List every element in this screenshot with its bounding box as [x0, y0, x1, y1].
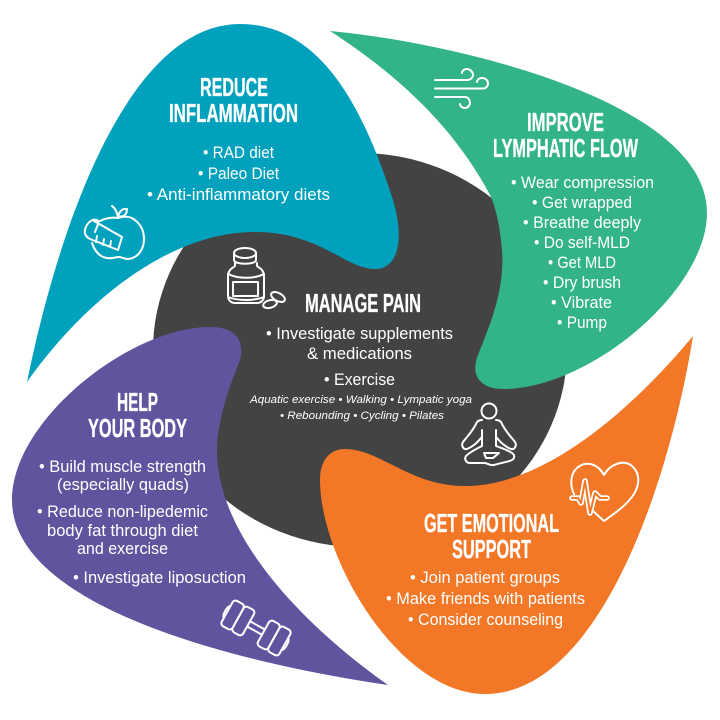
list: lymphatic actions	[511, 174, 654, 332]
icon: meditating figure	[462, 404, 516, 465]
list: body actions: • Reduce non-lipedemic	[37, 503, 208, 521]
list: pain actions: • Investigate supplements	[266, 325, 453, 343]
panel: get emotional support background	[320, 336, 693, 694]
heading: get emotional support: GET EMOTIONAL	[424, 508, 559, 538]
heading: help your body: YOUR BODY	[88, 413, 187, 443]
section: reduce inflammation text	[147, 72, 330, 204]
heading: improve lymphatic flow	[493, 107, 638, 163]
list: diets: • RAD diet	[203, 144, 274, 162]
icon: dumbbell	[218, 598, 294, 658]
section: help your body text	[37, 387, 246, 587]
list: lymphatic actions: • Get MLD	[548, 254, 616, 272]
list: support actions: • Join patient groups	[410, 569, 560, 587]
list: lymphatic actions: • Do self-MLD	[534, 234, 630, 252]
list: body actions: and exercise	[77, 540, 168, 558]
panel: reduce inflammation background	[27, 24, 399, 382]
panel: manage pain background	[153, 153, 567, 547]
list: pain actions: & medications	[307, 345, 412, 363]
list: lymphatic actions: • Vibrate	[551, 294, 612, 312]
heading: reduce inflammation	[169, 72, 298, 128]
list: body actions: • Build muscle strength	[39, 458, 206, 476]
icon: supplement bottle and pills	[228, 248, 286, 309]
panel: help your body background	[12, 327, 388, 685]
heading: improve lymphatic flow: LYMPHATIC FLOW	[493, 133, 638, 163]
heading: improve lymphatic flow: IMPROVE	[527, 107, 604, 137]
list: pain actions	[266, 325, 453, 389]
panel: improve lymphatic flow background	[330, 31, 707, 389]
heart outline	[571, 463, 638, 521]
pulse line fill	[572, 481, 607, 513]
heading: reduce inflammation: INFLAMMATION	[169, 98, 298, 128]
list: body actions: body fat through diet	[47, 522, 198, 540]
list: lymphatic actions: • Dry brush	[543, 274, 621, 292]
list: support actions: • Make friends with patients	[386, 590, 585, 608]
list: exercise types: Aquatic exercise • Walking • Lympatic yoga	[249, 394, 472, 406]
list: exercise types: • Rebounding • Cycling • Pilates	[280, 410, 445, 422]
list: exercise types	[249, 394, 472, 422]
icon: apple with tape measure	[85, 206, 144, 259]
icon: heart with pulse	[571, 463, 638, 521]
list: lymphatic actions: • Wear compression	[511, 174, 654, 192]
list: body actions: (especially quads)	[57, 476, 189, 494]
heading: get emotional support	[424, 508, 559, 564]
heading: get emotional support: SUPPORT	[452, 534, 531, 564]
list: diets: • Anti-inflammatory diets	[147, 186, 330, 204]
section: get emotional support text	[386, 508, 585, 629]
section: improve lymphatic flow text	[493, 107, 654, 332]
pulse line outline	[572, 481, 607, 513]
heading: manage pain: MANAGE PAIN	[305, 288, 421, 318]
list: lymphatic actions: • Breathe deeply	[523, 214, 642, 232]
list: pain actions: • Exercise	[324, 371, 395, 389]
list: diets: • Paleo Diet	[198, 165, 279, 183]
heading: help your body	[88, 387, 187, 443]
section: manage pain text	[249, 288, 472, 422]
list: lymphatic actions: • Pump	[557, 314, 607, 332]
heading: help your body: HELP	[117, 387, 158, 417]
list: diets	[147, 144, 330, 204]
list: body actions: • Investigate liposuction	[73, 569, 246, 587]
heading: reduce inflammation: REDUCE	[200, 72, 268, 102]
list: support actions	[386, 569, 585, 629]
list: body actions	[37, 458, 246, 587]
list: lymphatic actions: • Get wrapped	[532, 194, 632, 212]
list: support actions: • Consider counseling	[408, 611, 563, 629]
icon: wind	[435, 69, 488, 108]
